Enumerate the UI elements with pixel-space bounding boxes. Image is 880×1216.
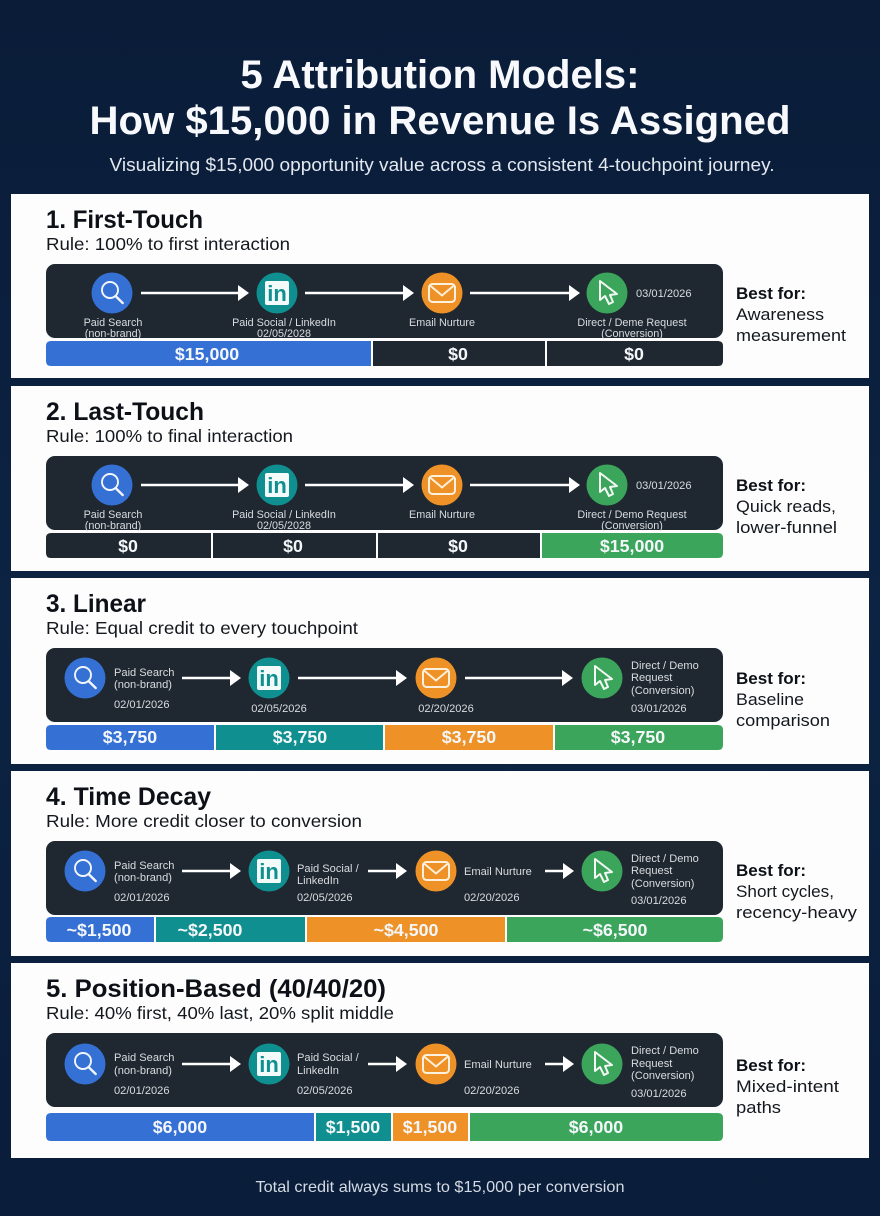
credit bar: $3,750 <box>103 727 157 747</box>
touchpoint labels <box>84 480 692 532</box>
heading: 4. Time Decay <box>46 783 211 811</box>
touchpoint labels: 03/01/2026 <box>631 895 687 907</box>
touchpoint labels: 02/05/2026 <box>297 1085 353 1097</box>
touchpoint labels: Request <box>631 1058 672 1070</box>
icon: cursor <box>586 464 628 506</box>
credit bar: ~$1,500 <box>67 920 131 940</box>
icon: email <box>416 1044 456 1084</box>
best for: Best for: <box>736 861 806 880</box>
best for <box>736 284 846 345</box>
icon: email <box>416 658 456 698</box>
credit bar: $1,500 <box>403 1117 457 1137</box>
panel: linear <box>11 578 869 764</box>
icon: search <box>92 272 132 314</box>
arrow <box>141 477 249 493</box>
icon: cursor <box>582 1044 622 1084</box>
icon: linkedin <box>248 658 290 698</box>
touchpoint labels: (Conversion) <box>631 685 695 697</box>
touchpoint labels: 03/01/2026 <box>631 1088 687 1100</box>
icon: search <box>64 658 106 698</box>
touchpoint labels: Email Nurture <box>409 509 475 521</box>
arrow <box>305 285 414 301</box>
rule: Rule: 40% first, 40% last, 20% split middle <box>46 1003 394 1023</box>
touchpoint labels: Paid Search <box>114 860 174 872</box>
arrow <box>470 477 580 493</box>
touchpoint labels: (non-brand) <box>114 1065 172 1077</box>
credit bar: $15,000 <box>600 536 664 556</box>
heading: 2. Last-Touch <box>46 398 204 426</box>
title <box>90 53 790 143</box>
touchpoint labels: Paid Search <box>114 667 174 679</box>
panel: position-based <box>11 963 869 1158</box>
icon: cursor <box>582 658 622 698</box>
best for: Best for: <box>736 669 806 688</box>
heading: 5. Position-Based (40/40/20) <box>46 975 386 1003</box>
journey strip <box>46 456 723 532</box>
credit bar <box>46 917 723 942</box>
arrow <box>545 1056 574 1072</box>
touchpoint labels: Email Nurture <box>464 866 532 878</box>
touchpoint labels: 03/01/2026 <box>636 480 692 492</box>
arrow <box>368 1056 407 1072</box>
credit bar: $3,750 <box>611 727 665 747</box>
touchpoint labels: 02/05/2026 <box>251 703 307 715</box>
touchpoint labels: 03/01/2026 <box>631 703 687 715</box>
icon: email <box>416 850 456 892</box>
credit bar: $15,000 <box>175 344 239 364</box>
best for <box>736 476 837 537</box>
touchpoint labels: Request <box>631 672 672 684</box>
icon: linkedin: in <box>267 281 287 306</box>
journey strip <box>46 1033 723 1107</box>
touchpoint labels: 02/01/2026 <box>114 892 170 904</box>
credit bar <box>46 1113 723 1141</box>
touchpoint labels: (non-brand) <box>85 520 141 532</box>
best for: Best for: <box>736 476 806 495</box>
best for <box>736 669 830 730</box>
best for: Best for: <box>736 1056 806 1075</box>
icon: linkedin: in <box>259 666 279 691</box>
touchpoint labels: Direct / Deme Request <box>577 317 687 329</box>
touchpoint labels: 02/20/2026 <box>418 703 474 715</box>
touchpoint labels: Direct / Demo <box>631 660 699 672</box>
arrow <box>305 477 414 493</box>
heading: 3. Linear <box>46 590 146 618</box>
footer note: Total credit always sums to $15,000 per conversion <box>256 1179 624 1196</box>
touchpoint labels: 02/05/2028 <box>257 328 311 340</box>
credit bar: $6,000 <box>153 1117 207 1137</box>
credit bar: $3,750 <box>273 727 327 747</box>
credit bar: $0 <box>118 536 138 556</box>
touchpoint labels: (Conversion) <box>601 520 663 532</box>
icon: email <box>422 272 462 314</box>
icon: linkedin <box>256 464 298 506</box>
panel: last-touch <box>11 386 869 571</box>
best for: Awareness <box>736 305 824 324</box>
touchpoint labels: LinkedIn <box>297 875 339 887</box>
icon: search <box>64 1044 106 1084</box>
best for: Short cycles, <box>736 882 834 901</box>
touchpoint labels: 02/05/2026 <box>297 892 353 904</box>
touchpoint labels: Paid Social / LinkedIn <box>232 509 336 521</box>
touchpoint labels: Direct / Demo <box>631 853 699 865</box>
arrow <box>368 863 407 879</box>
arrow <box>182 1056 241 1072</box>
icon: linkedin: in <box>259 1052 279 1077</box>
arrow <box>182 863 241 879</box>
credit bar: $6,000 <box>569 1117 623 1137</box>
credit bar <box>46 725 723 750</box>
journey strip <box>46 841 723 915</box>
icon: linkedin <box>256 272 298 314</box>
subtitle: Visualizing $15,000 opportunity value across a consistent 4-touchpoint journey. <box>110 155 774 175</box>
credit bar: ~$4,500 <box>374 920 438 940</box>
best for: Quick reads, <box>736 497 836 516</box>
best for: lower-funnel <box>736 518 837 537</box>
journey strip <box>46 264 723 340</box>
arrow <box>298 670 407 686</box>
credit bar: ~$6,500 <box>583 920 647 940</box>
touchpoint labels: Email Nurture <box>464 1059 532 1071</box>
credit bar: $0 <box>283 536 303 556</box>
heading: 1. First-Touch <box>46 206 203 234</box>
touchpoint labels: Email Nurture <box>409 317 475 329</box>
touchpoint labels <box>114 1045 699 1100</box>
credit bar: ~$2,500 <box>178 920 242 940</box>
touchpoint labels: Direct / Demo <box>631 1045 699 1057</box>
touchpoint labels: (non-brand) <box>85 328 141 340</box>
best for: Mixed-intent <box>736 1077 839 1096</box>
touchpoint labels: (non-brand) <box>114 679 172 691</box>
touchpoint labels: 03/01/2026 <box>636 288 692 300</box>
touchpoint labels: Paid Social / <box>297 1052 360 1064</box>
credit bar: $0 <box>448 536 468 556</box>
touchpoint labels: Paid Search <box>114 1052 174 1064</box>
touchpoint labels <box>114 660 699 715</box>
arrow <box>465 670 573 686</box>
touchpoint labels: 02/01/2026 <box>114 1085 170 1097</box>
touchpoint labels: Paid Search <box>84 509 142 521</box>
arrow <box>141 285 249 301</box>
touchpoint labels: Direct / Demo Request <box>577 509 687 521</box>
arrow <box>470 285 580 301</box>
best for: measurement <box>736 326 846 345</box>
touchpoint labels: 02/01/2026 <box>114 699 170 711</box>
touchpoint labels: 02/05/2028 <box>257 520 311 532</box>
touchpoint labels: LinkedIn <box>297 1065 339 1077</box>
arrow <box>545 863 574 879</box>
touchpoint labels: Request <box>631 865 672 877</box>
best for: paths <box>736 1098 781 1117</box>
best for: Baseline <box>736 690 804 709</box>
best for <box>736 1056 839 1117</box>
icon: linkedin: in <box>267 473 287 498</box>
touchpoint labels: Paid Social / <box>297 863 360 875</box>
credit bar: $0 <box>448 344 468 364</box>
credit bar <box>46 533 723 558</box>
rule: Rule: 100% to final interaction <box>46 426 293 446</box>
touchpoint labels: 02/20/2026 <box>464 892 520 904</box>
touchpoint labels: 02/20/2026 <box>464 1085 520 1097</box>
credit bar: $1,500 <box>326 1117 380 1137</box>
rule: Rule: 100% to first interaction <box>46 234 290 254</box>
touchpoint labels <box>114 853 699 907</box>
arrow <box>182 670 241 686</box>
credit bar: $0 <box>624 344 644 364</box>
touchpoint labels: (non-brand) <box>114 872 172 884</box>
credit bar: $3,750 <box>442 727 496 747</box>
rule: Rule: More credit closer to conversion <box>46 811 362 831</box>
best for: Best for: <box>736 284 806 303</box>
panel: first-touch <box>11 194 869 378</box>
icon: search <box>64 850 106 892</box>
rule: Rule: Equal credit to every touchpoint <box>46 618 358 638</box>
touchpoint labels: (Conversion) <box>631 1070 695 1082</box>
touchpoint labels: (Conversion) <box>601 328 663 340</box>
touchpoint labels: Paid Search <box>84 317 142 329</box>
touchpoint labels: (Conversion) <box>631 878 695 890</box>
touchpoint labels: Paid Social / LinkedIn <box>232 317 336 329</box>
best for: comparison <box>736 711 830 730</box>
best for <box>736 861 858 922</box>
icon: email <box>422 464 462 506</box>
icon: linkedin <box>248 850 290 892</box>
title: How $15,000 in Revenue Is Assigned <box>90 99 790 143</box>
best for: recency-heavy <box>736 903 858 922</box>
icon: cursor <box>582 850 622 892</box>
icon: linkedin: in <box>259 859 279 884</box>
icon: cursor <box>586 272 628 314</box>
icon: search <box>92 464 132 506</box>
journey strip <box>46 648 723 722</box>
panel: time decay <box>11 771 869 956</box>
icon: linkedin <box>248 1044 290 1084</box>
touchpoint labels <box>84 288 692 340</box>
title: 5 Attribution Models: <box>240 53 640 97</box>
credit bar <box>46 341 723 366</box>
